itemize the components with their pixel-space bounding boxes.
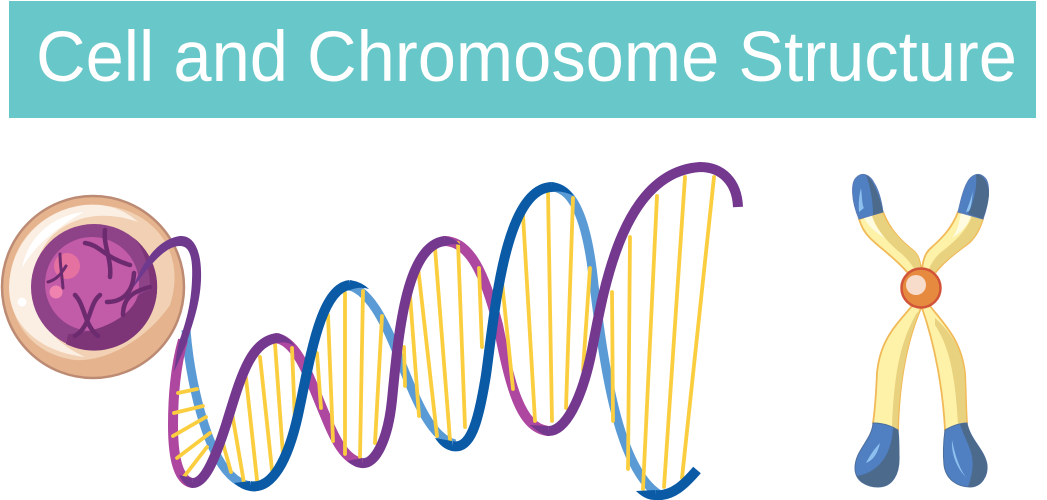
base pair rungs bbox=[173, 177, 714, 489]
back strand light blue bbox=[186, 187, 660, 495]
front strand purple bbox=[192, 167, 738, 483]
icon: chromosome bbox=[853, 174, 989, 487]
telomere: bottom left bbox=[855, 423, 899, 487]
icon: cell with nucleus bbox=[2, 196, 184, 378]
strand from nucleus, tapered bbox=[133, 236, 201, 372]
back strand dark blue bbox=[250, 187, 697, 495]
title banner bbox=[9, 1, 1036, 118]
chromosome arms bbox=[859, 212, 983, 430]
dark blue strand tapered seams bbox=[234, 182, 655, 500]
nucleus bbox=[31, 224, 157, 351]
nucleoli bbox=[54, 253, 80, 279]
telomere: bottom right bbox=[943, 423, 987, 487]
centromere bbox=[902, 268, 940, 308]
nucleus chromosomes bbox=[48, 230, 150, 336]
front strand magenta bbox=[173, 241, 548, 483]
arm shading bbox=[864, 213, 982, 429]
telomere: top right bbox=[958, 174, 989, 219]
purple strand tapered seams bbox=[179, 236, 548, 488]
title: Cell and Chromosome Structure bbox=[36, 18, 1017, 97]
telomere: top left bbox=[853, 174, 883, 219]
DNA double helix bbox=[133, 167, 738, 500]
